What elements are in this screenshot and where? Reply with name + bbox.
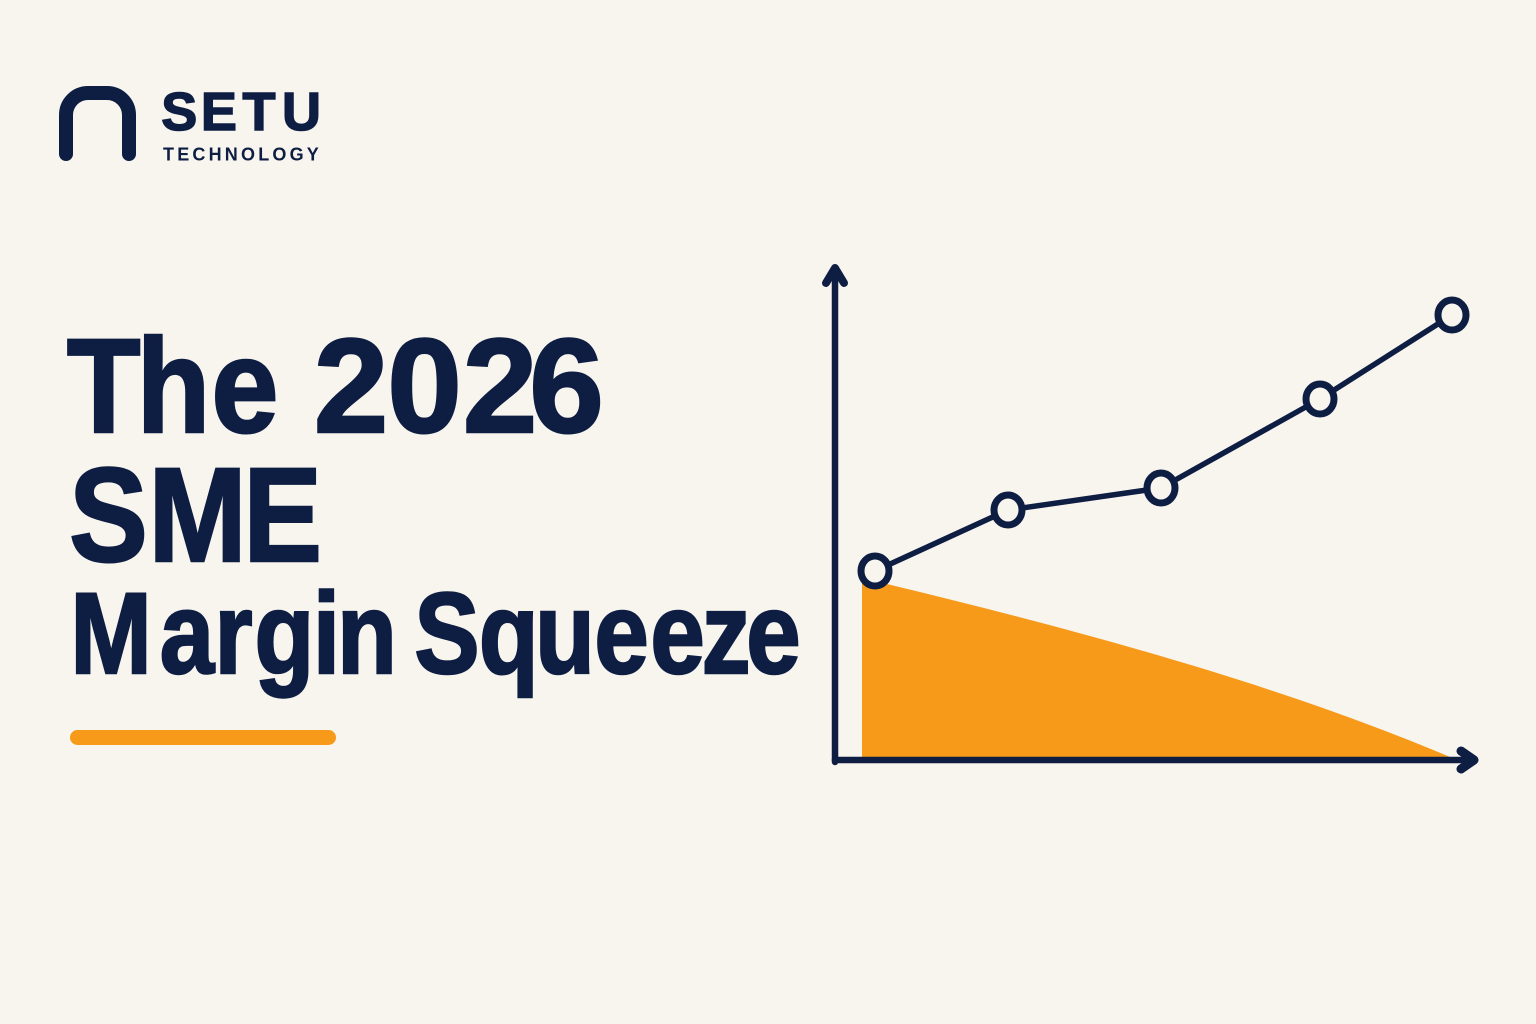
title line 1	[67, 312, 604, 461]
brand name: SETU	[161, 82, 321, 142]
logo	[66, 82, 322, 164]
chart	[826, 268, 1474, 769]
x axis arrow	[835, 751, 1474, 769]
data points	[861, 300, 1466, 586]
title line 2: SME	[69, 440, 322, 590]
title line 1: The	[67, 312, 278, 461]
title line 3: Margin Squeeze	[70, 568, 801, 698]
title line 1: 2026	[314, 312, 604, 461]
orange margin area	[862, 578, 1450, 757]
line series	[875, 315, 1452, 571]
icon: logo arch	[66, 93, 129, 154]
accent underline	[70, 730, 336, 745]
brand subtitle: TECHNOLOGY	[163, 144, 322, 164]
title	[67, 312, 801, 698]
y axis arrow	[826, 268, 844, 762]
